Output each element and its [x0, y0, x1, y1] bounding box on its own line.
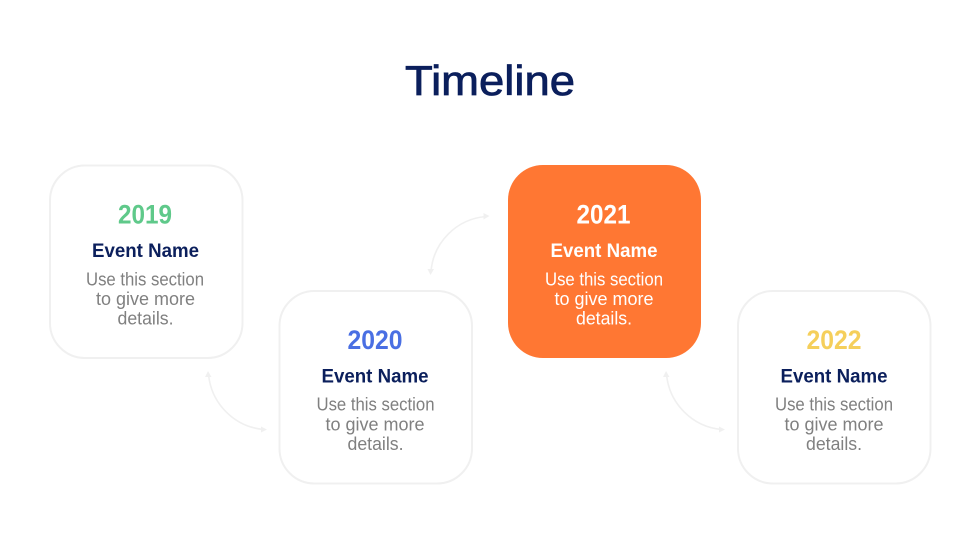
arrow: 2019 to 2020: [205, 371, 267, 432]
details 2019: Use this section: [86, 270, 204, 290]
year 2019: 2019: [118, 200, 172, 230]
year 2022: 2022: [806, 325, 862, 355]
panel: 2021 event: [508, 165, 701, 358]
card background 2020: [280, 291, 472, 484]
details 2022: [775, 394, 893, 454]
arrow: 2021 to 2022: [663, 371, 725, 432]
panel: 2019 event: [50, 166, 242, 358]
details 2020: details.: [348, 434, 404, 454]
details 2021: Use this section: [545, 270, 663, 290]
details 2020: [316, 394, 434, 454]
event name 2021: Event Name: [550, 240, 658, 262]
details 2021: [545, 270, 663, 328]
details 2022: Use this section: [775, 394, 893, 414]
details 2019: [86, 270, 204, 328]
card background 2019: [50, 166, 242, 358]
event name 2022: Event Name: [780, 366, 888, 388]
year 2021: 2021: [576, 200, 630, 230]
panel: 2020 event: [280, 291, 472, 484]
card background 2022: [738, 291, 930, 484]
event name 2020: Event Name: [322, 366, 429, 388]
arrow: 2020 to 2021: [428, 213, 490, 275]
event name 2019: Event Name: [92, 240, 199, 262]
panel: 2022 event: [738, 291, 930, 484]
title: Timeline: [405, 57, 575, 104]
details 2019: details.: [118, 308, 174, 328]
details 2021: to give more: [554, 289, 654, 309]
year 2020: 2020: [348, 325, 402, 355]
details 2019: to give more: [96, 289, 195, 309]
details 2020: Use this section: [316, 394, 434, 414]
details 2020: to give more: [326, 414, 424, 434]
details 2021: details.: [576, 308, 632, 328]
details 2022: details.: [806, 434, 862, 454]
card background 2021: [508, 165, 701, 358]
details 2022: to give more: [784, 414, 884, 434]
